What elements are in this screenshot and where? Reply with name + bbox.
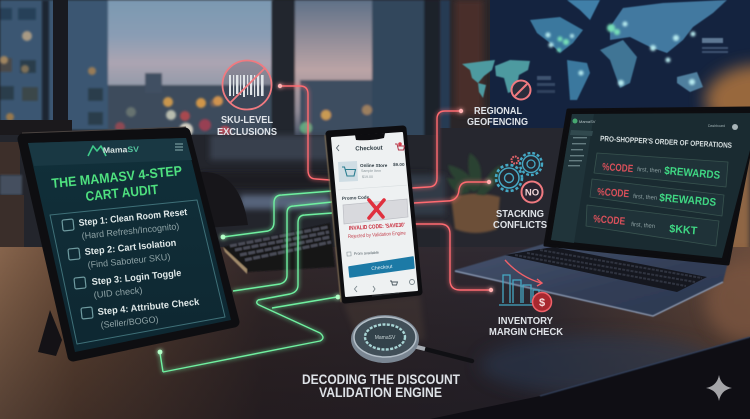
row 2 xyxy=(590,179,724,216)
row 1: first, then xyxy=(637,167,661,175)
phone header: Checkout xyxy=(355,146,383,152)
tablet title: THE MAMASV 4-STEP xyxy=(51,163,183,191)
potted plant xyxy=(447,153,500,233)
panel: world map wall display xyxy=(530,0,728,100)
row 3: $KKT xyxy=(669,223,698,237)
product row xyxy=(338,161,408,190)
keyboard xyxy=(223,223,335,274)
laptop sidebar: Dashboard xyxy=(708,124,725,128)
label: SKU-level exclusions: EXCLUSIONS xyxy=(217,126,277,138)
label: stacking conflicts: STACKING xyxy=(496,208,544,220)
tablet screen xyxy=(28,138,231,352)
interior wall strip xyxy=(0,135,440,250)
red neon connector lines xyxy=(280,86,491,290)
logo xyxy=(88,145,140,156)
tablet title: CART AUDIT xyxy=(85,182,160,204)
invalid code message: INVALID CODE: 'SAVE30' xyxy=(349,223,406,232)
product row: Sample Item xyxy=(361,169,381,173)
title: decoding the discount validation engine: VALIDATION ENGINE xyxy=(319,384,442,400)
left city building xyxy=(0,0,273,135)
label: regional geofencing: REGIONAL xyxy=(474,105,523,117)
icon: magnifying glass xyxy=(351,315,472,363)
label: regional geofencing xyxy=(467,105,528,128)
logo: MamaSV xyxy=(103,145,140,155)
step 2 xyxy=(68,238,177,270)
tablet bezel xyxy=(23,133,234,356)
step 2: Step 2: Cart Isolation xyxy=(84,238,177,258)
label: stacking conflicts xyxy=(493,208,547,231)
label: SKU-level exclusions: SKU-LEVEL xyxy=(221,114,274,126)
row 1: %CODE xyxy=(602,161,634,175)
tablet header xyxy=(28,138,192,166)
window frames xyxy=(42,0,49,122)
desk front edge shadow xyxy=(430,337,750,419)
middle pane xyxy=(213,0,440,153)
map glow points xyxy=(546,22,696,86)
step 3: (UID check) xyxy=(93,285,143,300)
phone header xyxy=(336,142,404,152)
chair silhouette xyxy=(200,172,248,228)
checklist box xyxy=(50,200,225,344)
blurred room behind desk xyxy=(200,135,445,215)
icon: sparkle watermark xyxy=(706,375,732,401)
label: SKU-level exclusions xyxy=(217,114,277,138)
tablet stand xyxy=(38,310,62,356)
row 1 xyxy=(594,153,728,187)
icon: falling margin bar chart with dollar xyxy=(499,260,552,312)
step 1 xyxy=(62,207,189,241)
laptop screen bezel xyxy=(545,108,750,264)
phone screen xyxy=(332,133,417,296)
row 3 xyxy=(586,205,719,246)
step 4: Step 4: Attribute Check xyxy=(97,297,200,318)
tablet with 4-step cart audit xyxy=(22,127,234,356)
step 1: (Hard Refresh/Incognito) xyxy=(81,221,180,241)
laptop screen xyxy=(551,113,750,258)
step 2: (Find Saboteur SKU) xyxy=(87,252,171,270)
laptop sidebar xyxy=(551,114,738,243)
hamburger menu xyxy=(175,144,183,150)
green neon connector lines xyxy=(160,191,337,372)
desk surface xyxy=(0,247,750,419)
product row: Online Store xyxy=(360,163,388,168)
product row: $19.00 xyxy=(362,175,373,179)
checkout button xyxy=(349,257,414,277)
tablet title xyxy=(51,163,183,204)
row 3: first, then xyxy=(631,222,655,230)
row 2: %CODE xyxy=(597,186,630,200)
map caption blur xyxy=(537,38,728,93)
icon: gears with NO badge xyxy=(496,153,542,202)
phone checkout screen xyxy=(325,129,425,345)
title: decoding the discount validation engine: DECODING THE DISCOUNT xyxy=(302,371,460,387)
laptop base xyxy=(455,243,728,316)
product row: $9.00 xyxy=(393,162,405,167)
row 1: $REWARDS xyxy=(664,165,721,182)
green connector end dots xyxy=(158,235,340,354)
phone body xyxy=(329,129,419,300)
label: inventory margin check xyxy=(489,315,563,338)
laptop sidebar: MamaSV xyxy=(579,119,596,124)
label: stacking conflicts: CONFLICTS xyxy=(493,219,547,231)
label: inventory margin check: INVENTORY xyxy=(498,315,553,327)
icon: gears with NO badge: NO xyxy=(525,188,539,198)
laptop keyboard xyxy=(505,247,707,292)
invalid code message: Rejected by Validation Engine xyxy=(348,230,406,240)
bokeh lights xyxy=(0,31,231,138)
phone nav icons xyxy=(354,280,414,296)
title: decoding the discount validation engine xyxy=(302,371,460,400)
promo code field: Promo Code xyxy=(342,195,370,201)
row 2: $REWARDS xyxy=(659,192,717,209)
row 2: first, then xyxy=(633,194,657,202)
label: regional geofencing: GEOFENCING xyxy=(467,116,528,128)
icon: falling margin bar chart with dollar: $ xyxy=(539,297,545,309)
label: inventory margin check: MARGIN CHECK xyxy=(489,326,563,338)
step 3: Step 3: Login Toggle xyxy=(91,268,182,288)
red X mark xyxy=(369,200,384,218)
phone reflection xyxy=(343,295,425,345)
from available checkbox: From available xyxy=(354,251,379,256)
icon: regional map with prohibition sign xyxy=(462,60,530,100)
icon: magnifying glass: MamaSV xyxy=(375,335,396,341)
step 1: Step 1: Clean Room Reset xyxy=(78,207,189,229)
invalid code message xyxy=(348,223,406,240)
row 3: %CODE xyxy=(593,213,626,228)
step 4 xyxy=(81,297,200,330)
icon: barcode prohibited xyxy=(222,60,272,110)
notch xyxy=(355,133,385,140)
promo code field xyxy=(342,195,408,224)
laptop xyxy=(455,108,750,316)
step 4: (Seller/BOGO) xyxy=(100,314,159,330)
checkout button: Checkout xyxy=(371,264,393,272)
red connector end dots xyxy=(278,84,493,292)
step 3 xyxy=(74,268,182,300)
